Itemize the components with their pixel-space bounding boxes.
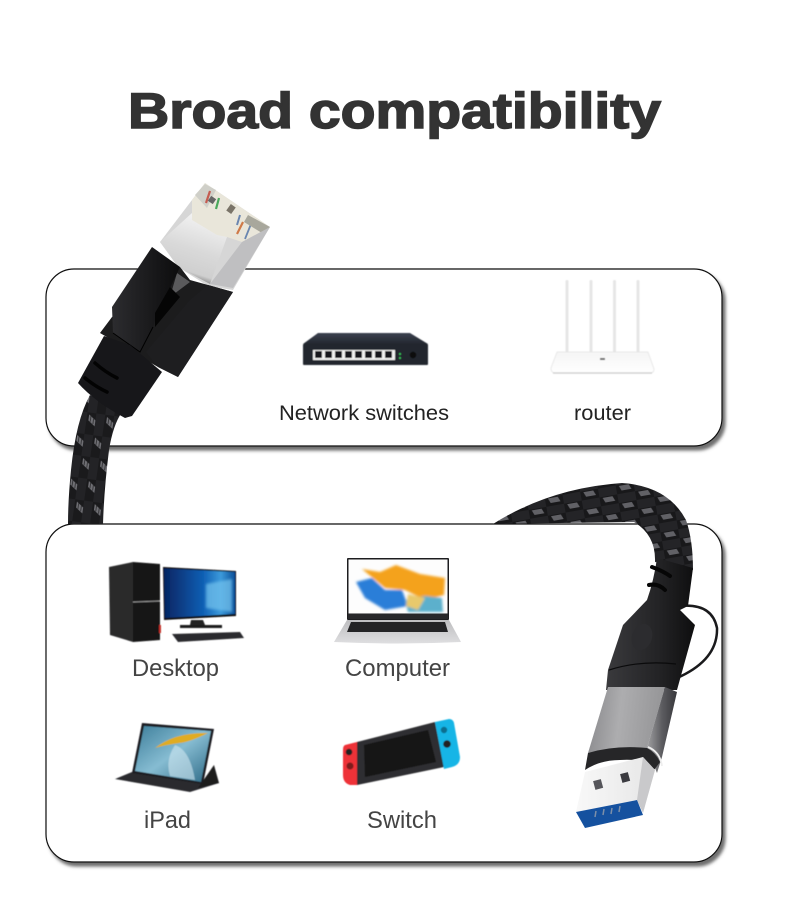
usb: black body [606,558,695,690]
usb: blue tongue [576,800,643,828]
panel: network devices [46,269,722,446]
label: router: router [574,401,631,425]
label: network switches: Network switches [279,401,449,425]
connector: housing [100,267,233,377]
connector: transparent tip [192,183,270,242]
icon: laptop computer [334,558,461,644]
usb: aluminium shell [588,687,665,753]
connector: silver shield body [160,213,227,284]
USB connector [576,558,717,828]
icon: desktop computer [109,562,244,642]
connector: metal side [210,227,270,288]
icon: network switch [303,333,428,365]
label: desktop: Desktop [132,655,219,682]
icon: router [551,280,654,373]
label: computer: Computer [345,655,450,682]
connector: latch [112,247,180,352]
usb: metal plug [576,757,655,813]
panel: computing devices [46,524,722,862]
RJ45 connector [78,183,270,418]
icon: tablet [115,723,219,792]
cable: braided segment right [493,483,693,570]
connector: strain relief [78,336,162,418]
connector: latch gap [170,273,190,297]
cable: braided segment left [68,395,122,524]
title: Broad compatibility [128,83,661,139]
connector: backing of tip [160,183,270,290]
label: switch: Switch [367,807,437,834]
cable loop [677,606,717,678]
label: ipad: iPad [144,807,191,834]
icon: game console [343,719,460,785]
